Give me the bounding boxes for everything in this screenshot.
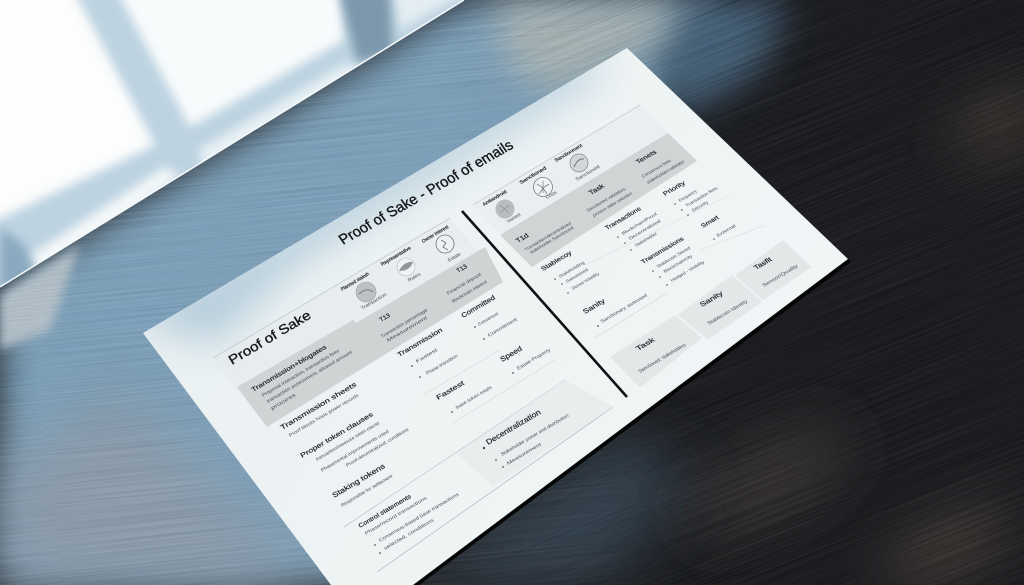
text block: committed: Commitment [487, 316, 519, 339]
text block: committed: Committed [460, 294, 497, 320]
icon: leaf [397, 258, 415, 276]
icon labels: Antiandroid [481, 189, 509, 207]
band text: tesla: Tenets [635, 149, 658, 165]
text block: transmission sheets: Proof blocks hosts power records [288, 393, 360, 439]
band text: t13 first: T13 [378, 312, 392, 324]
text block: control statements: Phase/record transactions [364, 495, 429, 537]
paper sheet [130, 48, 851, 585]
text block: stablecoy: Stablecoy [540, 249, 574, 272]
band text: transmission: Transmission+blogates [250, 344, 328, 394]
text block: control statements: Control statements [357, 493, 413, 530]
text block: fastest: base token totals [455, 384, 494, 411]
text block: stablecoy: Sanctioned [564, 267, 590, 284]
band text: task: Task [588, 183, 607, 196]
band text: t13 first: Transaction percentage [380, 308, 429, 340]
box: sanity [678, 275, 762, 340]
box: sanity: Stablecoin Identity [706, 299, 749, 326]
band text: transmission [250, 344, 354, 412]
icon labels: Owner interest [421, 224, 450, 245]
text block: stablecoy [540, 249, 601, 294]
band text: t1d: Transaction/decentralized [523, 221, 573, 252]
icon labels: Representative [380, 245, 412, 268]
box: tasfit: Tasfit [753, 257, 774, 271]
box: tasfit [735, 240, 812, 300]
text block: priority [662, 180, 719, 216]
text block: decentralization: Measurement [506, 441, 543, 467]
icon labels: Rates [407, 271, 423, 284]
band text: tesla [635, 149, 686, 185]
icon labels: Planned stakeh [340, 271, 371, 293]
text block: transmission: Transmission [396, 327, 444, 359]
icon: coin [496, 200, 514, 218]
text block: decentralization: Stakeholder power and distribution [500, 413, 570, 458]
band text: task: Sanctioned validators [585, 186, 627, 213]
band text: transmission: process [270, 392, 298, 412]
text block: transactions [604, 206, 662, 251]
text block: transmission: Phase-transition [425, 353, 459, 377]
text block: transactions: Decentralized [627, 218, 662, 241]
text block: transmissions: Stablecoin Stored [655, 245, 692, 269]
icon: outline glyph [436, 235, 454, 253]
icon labels: Costs [544, 190, 559, 200]
heading: proof of sake: Proof of Sake [226, 308, 314, 367]
highlighted band [500, 133, 697, 267]
text block: transactions: Transactions [604, 206, 643, 231]
band text: t13 first: Measurement [386, 315, 429, 344]
title: Proof of Sake - Proof of emails [336, 137, 517, 248]
text block: proper token clauses: Phase/rental improvements used [320, 429, 390, 474]
band text: t13 second: T13 [455, 263, 469, 275]
icon labels [340, 224, 462, 312]
text block: transmission sheets [279, 381, 360, 439]
text block: proper token clauses: Proof-decentralized; conditions [345, 427, 410, 469]
text block: committed: Consensus [477, 311, 500, 328]
window light reflection [0, 0, 470, 290]
text block: staking tokens: Staking tokens [330, 461, 387, 500]
text block: fastest: Fastest [435, 380, 466, 402]
box: tasfit: Sensor/Quality [761, 263, 800, 288]
text block: transmissions: Transmissions [640, 236, 686, 265]
text block: staking tokens: Responsible for settlement [340, 473, 394, 509]
text block: smart: External [715, 223, 737, 238]
text block: sanity: Sanctionary, assessed [599, 293, 649, 324]
band text: t13 second: Financial deposit [446, 271, 483, 297]
text block: transmissions: Blockchain/city [662, 253, 694, 274]
text block: transmissions [640, 236, 706, 286]
text block: stablecoy: Stored Volatility [570, 271, 601, 291]
text block: transmission sheets: Transmission sheets [279, 381, 359, 432]
box: task: Sanctioned: stakeholders [637, 342, 688, 374]
text block: smart [700, 215, 737, 240]
text block: staking tokens [330, 461, 394, 509]
text block: sanity [582, 293, 649, 327]
panel: right proof of emails [473, 105, 812, 388]
text block: transmission: Fastest [415, 347, 440, 365]
icon: network nodes [534, 178, 552, 196]
text block: stablecoy: Stakeholding [557, 260, 586, 279]
text block: decentralization [483, 408, 570, 468]
text block: transactions: Blockchain/Proof [620, 211, 659, 236]
divider between columns [462, 211, 627, 397]
window sill highlight [0, 0, 464, 287]
text block: priority: Priority [662, 180, 688, 197]
text block: seed: Estate Property [516, 347, 552, 372]
text block: seed [498, 344, 552, 374]
band text: task: process stake selection [591, 191, 634, 218]
text block: proper token clauses: Proper token clauses [299, 411, 375, 460]
text block: decentralization: Decentralization [484, 408, 542, 447]
icon labels: Sanctionment [553, 143, 585, 163]
box: sanity: Sanity [699, 290, 725, 308]
text block: control statements: Consensus-based base transactions [378, 491, 461, 544]
text block: transactions: Stakeholder [633, 231, 659, 248]
text block: priority: Frequency [677, 188, 698, 203]
text block: committed [460, 294, 519, 340]
text block: transmission [396, 327, 459, 378]
icon labels: Varied [505, 212, 522, 224]
text block: control statements [357, 491, 461, 554]
icon labels: Sanctioned [518, 166, 548, 185]
highlighted band [237, 247, 503, 427]
band text: t13 second [446, 263, 489, 305]
band text: task [585, 183, 634, 218]
icon: stake coin [356, 282, 376, 302]
text block: sanity: Sanity [582, 298, 607, 315]
band text: tesla: stakeholder/validator [645, 159, 686, 185]
band text: transmission: Proposal interaction, transaction fees [261, 348, 341, 399]
text block: control statements: selected, conditions [383, 517, 436, 552]
text block: fastest [435, 380, 494, 413]
text block: transmissions: Hedged - Visibility [669, 259, 706, 283]
text block: priority: Security [690, 199, 710, 213]
icon labels: Estate [447, 251, 462, 264]
band text: tesla: Consensus fees [640, 158, 673, 179]
icon labels: Transaction [360, 292, 388, 312]
text block: seed: Speed [498, 344, 524, 364]
box: task [610, 315, 702, 388]
text block: smart: Smart [700, 215, 721, 229]
text block: proper token clauses [299, 411, 410, 474]
panel: left proof of stake [213, 218, 613, 572]
icon labels [481, 143, 602, 224]
box: task: Task [635, 337, 657, 352]
band text: t1d: T1d [515, 233, 531, 244]
icon labels: Sanctioned [574, 164, 602, 182]
band text: t13 second: Blockchain interest [451, 279, 489, 305]
text block: proper token clauses: transaction/measure token clause [315, 420, 381, 463]
text block: priority: Transaction fees [684, 185, 719, 208]
icon: globe [570, 154, 588, 172]
band text: t1d: stakeholder Sanctioned [528, 225, 575, 255]
decentralization box [456, 380, 613, 487]
band text: transmission: transaction assessment, allowed amount [266, 349, 354, 405]
